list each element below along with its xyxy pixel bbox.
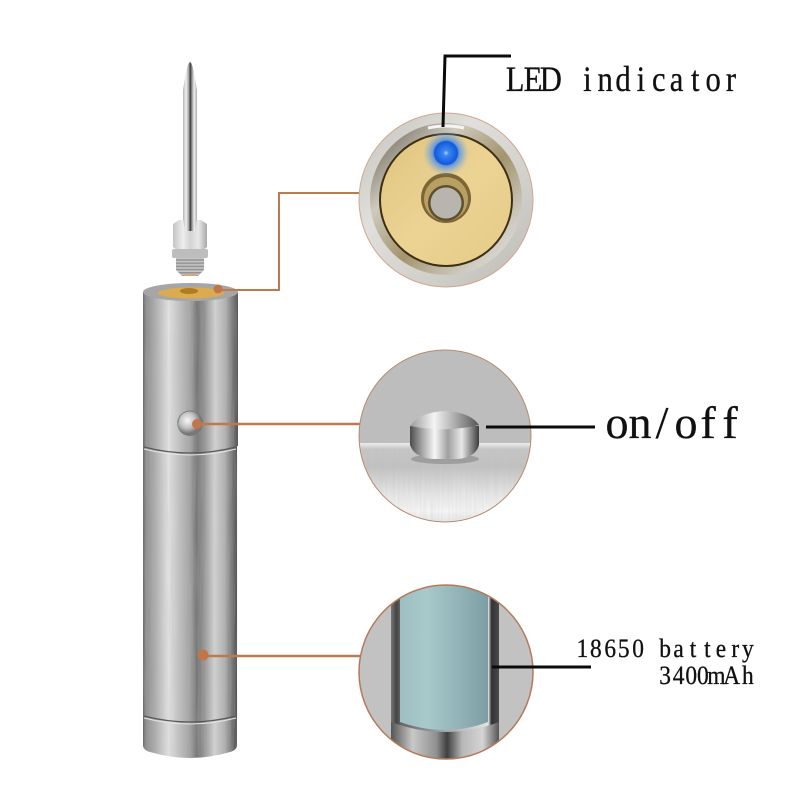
connector: top	[218, 193, 360, 290]
button	[177, 410, 203, 436]
label: on/off: on/off	[606, 397, 738, 448]
hex nut	[173, 220, 207, 250]
bottom groove	[144, 716, 236, 722]
LED	[423, 130, 469, 176]
threaded end	[176, 258, 204, 276]
outline: on/off circle	[359, 350, 531, 522]
metal band	[391, 722, 499, 762]
button close-up	[410, 411, 479, 464]
pen body	[143, 283, 238, 762]
detail circle: on/off button	[358, 350, 532, 523]
collar	[172, 249, 208, 258]
label: LED indicator: LED indicator	[506, 60, 736, 100]
soldering tip	[172, 62, 208, 276]
detail circle: LED top view	[359, 113, 533, 287]
connector: battery	[203, 655, 360, 657]
brushed texture	[143, 292, 238, 762]
lower barrel	[143, 440, 237, 720]
mid groove	[144, 447, 236, 453]
detail circle: battery	[358, 585, 534, 762]
bottom cap	[143, 716, 237, 758]
black line: battery	[492, 666, 591, 668]
label: 18650 battery: 18650 battery	[576, 635, 754, 663]
brushed surface	[386, 490, 504, 520]
centre contact	[421, 173, 471, 223]
label: 3400mAh: 3400mAh	[659, 662, 754, 690]
outline: battery circle	[359, 585, 533, 759]
upper barrel	[143, 292, 238, 451]
tip shaft	[183, 62, 197, 229]
black line: LED	[443, 56, 511, 127]
top rim	[143, 283, 238, 301]
rim highlight	[428, 126, 464, 128]
connector dots	[192, 284, 222, 660]
black line: on/off	[486, 426, 595, 428]
shaft base	[183, 218, 197, 231]
brown connector lines	[197, 193, 360, 656]
brass top	[158, 288, 224, 298]
connector: button	[197, 423, 360, 425]
centre hole	[180, 288, 198, 294]
battery cell	[391, 585, 499, 735]
